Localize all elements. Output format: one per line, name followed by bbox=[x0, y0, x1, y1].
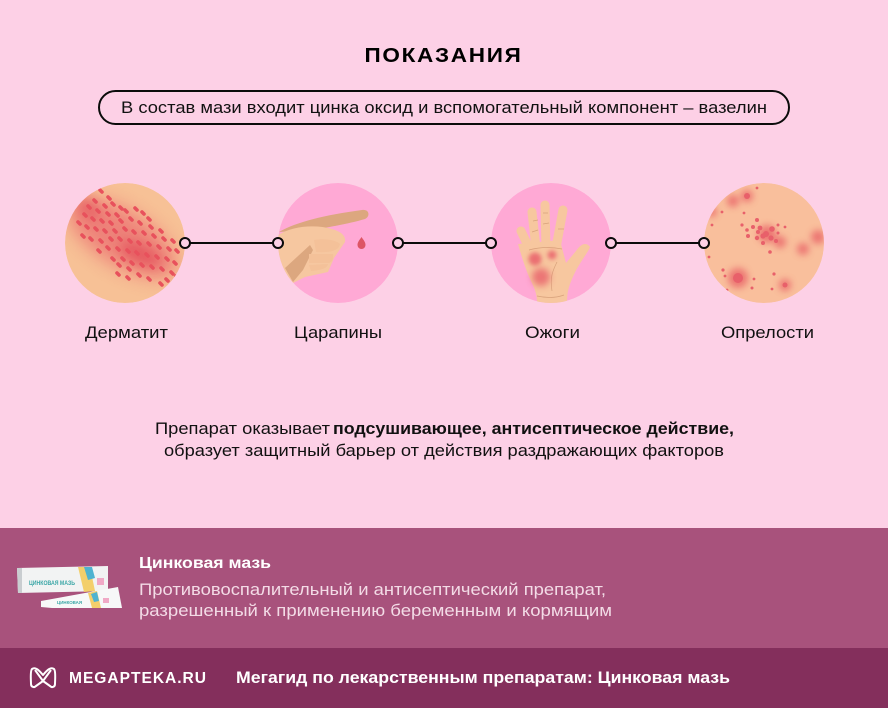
label: diaper rash: Опрелости bbox=[721, 324, 814, 342]
icon: product box and tube: ЦИНКОВАЯ МАЗЬ bbox=[29, 580, 75, 587]
composition callout bbox=[99, 91, 789, 124]
brand name: MEGAPTEKA.RU bbox=[69, 670, 207, 687]
connector: dermatitis to scratches bbox=[180, 238, 283, 248]
description text: образует защитный барьер от действия раздражающих факторов bbox=[164, 442, 724, 460]
icon: scratched finger bbox=[270, 183, 398, 303]
footer bbox=[0, 648, 888, 708]
label: scratches: Царапины bbox=[294, 324, 382, 342]
footer guide title: Мегагид по лекарственным препаратам: Цинковая мазь bbox=[236, 669, 730, 687]
product description bbox=[139, 581, 612, 620]
icon: megapteka logo bbox=[31, 668, 55, 687]
connector: scratches to burns bbox=[393, 238, 496, 248]
description text: подсушивающее, антисептическое действие, bbox=[333, 420, 734, 438]
label: burns: Ожоги bbox=[525, 324, 580, 342]
product description: Противовоспалительный и антисептический препарат, bbox=[139, 581, 606, 599]
description text bbox=[155, 420, 734, 460]
product name: Цинковая мазь bbox=[139, 555, 271, 572]
icon: product box and tube: ЦИНКОВАЯ bbox=[57, 600, 82, 605]
description text: Препарат оказывает bbox=[155, 420, 330, 438]
panel: product bbox=[0, 528, 888, 648]
product description: разрешенный к применению беременным и кормящим bbox=[139, 602, 612, 620]
icon: burned hand bbox=[491, 183, 611, 303]
icon: diaper rash bbox=[704, 183, 825, 303]
connector: burns to diaper rash bbox=[606, 238, 709, 248]
icon: dermatitis bbox=[65, 183, 185, 303]
title: ПОКАЗАНИЯ bbox=[364, 45, 522, 67]
icon: product box and tube bbox=[17, 566, 122, 608]
composition callout: В состав мази входит цинка оксид и вспомогательный компонент – вазелин bbox=[121, 99, 767, 117]
icon: blood drop bbox=[358, 237, 366, 249]
label: dermatitis: Дерматит bbox=[85, 324, 168, 342]
